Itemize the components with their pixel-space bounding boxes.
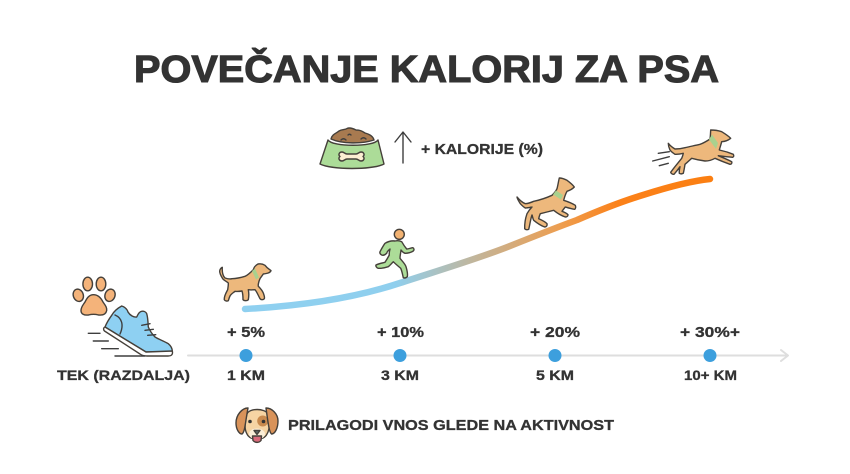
point: 1 km: + 5% [227,324,265,341]
point: 5 km: + 20% [530,324,580,341]
point: 5 km [530,324,580,383]
icon: running person [376,229,414,278]
point: 10+ km: + 30%+ [680,324,740,341]
axis line [188,350,788,361]
icon: trotting dog [517,178,576,230]
footer note [236,408,614,442]
speed lines [88,333,145,356]
calorie curve [245,179,710,309]
point: 1 km [227,324,265,383]
icon: walking dog [220,264,271,301]
point: 1 km: 1 KM [227,367,265,383]
icon: speed lines [653,152,669,166]
point: 10+ km [680,324,740,383]
title: POVEČANJE KALORIJ ZA PSA [134,46,719,91]
icon: leaping dog [653,130,734,174]
legend label: + KALORIJE (%) [421,142,543,158]
icon: running shoe [104,306,173,356]
axis title: TEK (RAZDALJA) [57,367,190,383]
icon: food bowl [320,128,384,168]
point: 5 km: 5 KM [536,367,574,383]
icon: dog face [236,408,278,442]
icon: up arrow [395,132,411,163]
point: 3 km [377,324,424,383]
icon: paw and shoe [71,277,173,356]
point: 10+ km: 10+ KM [684,367,737,383]
icon: paw [71,277,117,315]
note text: PRILAGODI VNOS GLEDE NA AKTIVNOST [288,418,614,434]
legend: calories [320,128,543,168]
point: 3 km: 3 KM [381,367,419,383]
point: 3 km: + 10% [377,324,424,341]
